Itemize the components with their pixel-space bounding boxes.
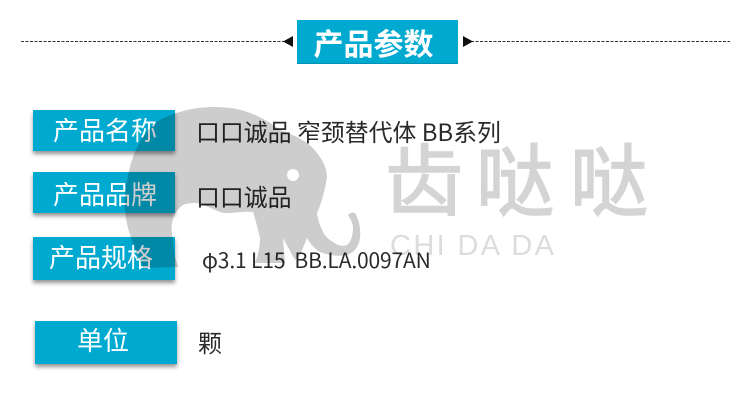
label: product name [33,110,175,151]
value: product name: 口口诚品 窄颈替代体 BB系列 [196,113,501,148]
icon: elephant [125,107,360,268]
value: brand: 口口诚品 [196,178,292,213]
label: brand: 产品品牌 [53,175,157,212]
section heading [21,20,730,64]
label: product name: 产品名称 [53,111,157,148]
label: unit [35,321,177,364]
label: specification: 产品规格 [49,238,153,275]
label: specification [33,237,175,280]
label: unit: 单位 [77,321,129,358]
value: specification: φ3.1 L15 BB.LA.0097AN [202,245,431,275]
section heading: 产品参数 [314,20,434,64]
label: brand [33,172,175,213]
value: unit: 颗 [198,324,222,359]
logo text: Latin name: CHI DA DA [390,230,555,262]
logo text: Chinese name: 齿哒哒 [385,120,648,232]
